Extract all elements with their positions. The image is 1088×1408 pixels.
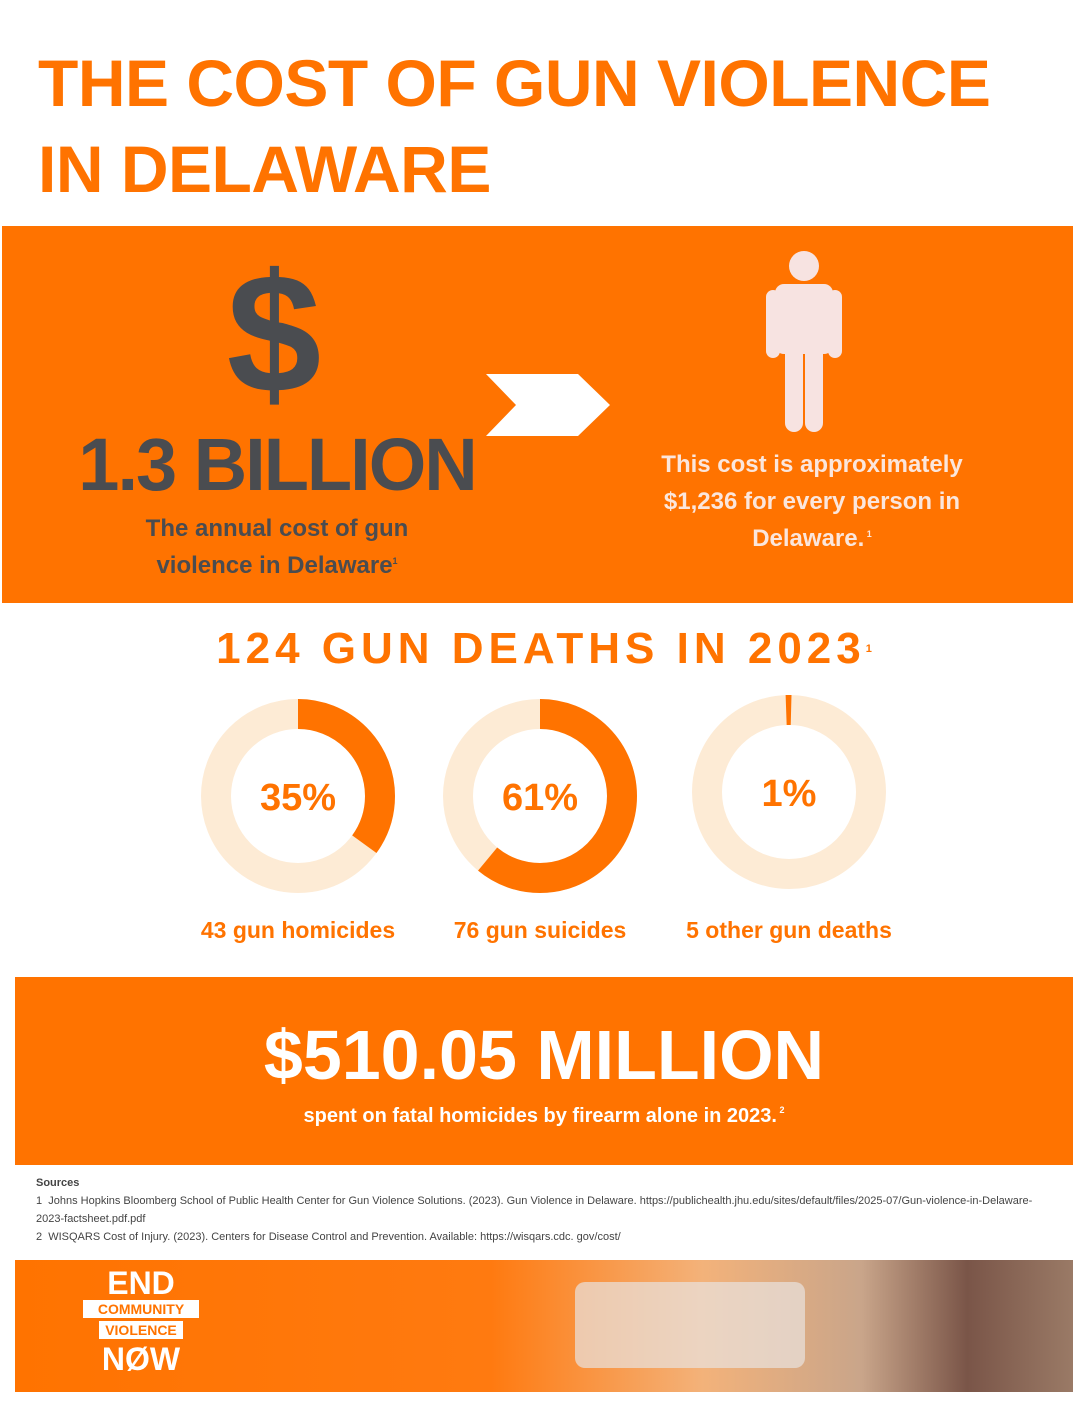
labels (201, 917, 892, 943)
text: annual cost: The annual cost of gun (146, 515, 408, 542)
text: per person cost: $1,236 for every person in (664, 488, 960, 515)
sources: 2 WISQARS Cost of Injury. (2023). Centers for Disease Control and Prevention. Available: https://wisqars.cdc. gov/cost/ (36, 1231, 621, 1243)
donut: suicides (458, 714, 622, 878)
panel: annual cost (2, 226, 1073, 603)
text: per person cost (661, 451, 963, 552)
big number: 1.3 billion: 1.3 BILLION (78, 423, 476, 506)
title: IN DELAWARE (38, 132, 491, 206)
panel: homicide spending (15, 977, 1073, 1165)
donut: suicides: 61% (502, 777, 578, 819)
arrow: chevron (486, 374, 610, 436)
text: per person cost: Delaware. 1 (752, 525, 872, 552)
donut: homicides (216, 714, 380, 878)
logo: END (107, 1265, 175, 1301)
banner: end community violence now (15, 1260, 1073, 1392)
labels: 5 other gun deaths (686, 917, 892, 943)
icon: dollar sign: $ (227, 239, 321, 429)
sources: 1 Johns Hopkins Bloomberg School of Public Health Center for Gun Violence Solutions. (2023). Gun Violence in Delaware. https://publichealth.jhu.edu/sites/default/files/2025-07/Gun-violence-in-Delaware-2023-factsheet.pdf.pdf (36, 1195, 1032, 1225)
big number: $510.05 MILLION (264, 1016, 824, 1094)
sources: Sources (36, 1177, 79, 1189)
title (38, 46, 990, 206)
icon: person (766, 251, 842, 432)
labels: 43 gun homicides (201, 917, 395, 943)
text: annual cost (146, 515, 408, 579)
chart: donuts (201, 695, 892, 943)
logo: NØW (102, 1341, 180, 1377)
labels: 76 gun suicides (454, 917, 626, 943)
logo (83, 1265, 199, 1377)
logo: COMMUNITY (98, 1301, 184, 1317)
text: per person cost: This cost is approximately (661, 451, 963, 478)
title: THE COST OF GUN VIOLENCE (38, 46, 990, 120)
caption: spent on fatal homicides by firearm alone in 2023. 2 (304, 1105, 784, 1127)
donut: other: 1% (762, 773, 816, 815)
heading: gun deaths: 124 GUN DEATHS IN 20231 (216, 624, 872, 673)
photo suggestion: sleeve (575, 1282, 805, 1368)
donut: other (704, 707, 874, 877)
text: annual cost: violence in Delaware1 (156, 552, 398, 579)
logo: VIOLENCE (105, 1322, 177, 1338)
donut: homicides: 35% (260, 777, 336, 819)
sources (36, 1177, 1032, 1243)
